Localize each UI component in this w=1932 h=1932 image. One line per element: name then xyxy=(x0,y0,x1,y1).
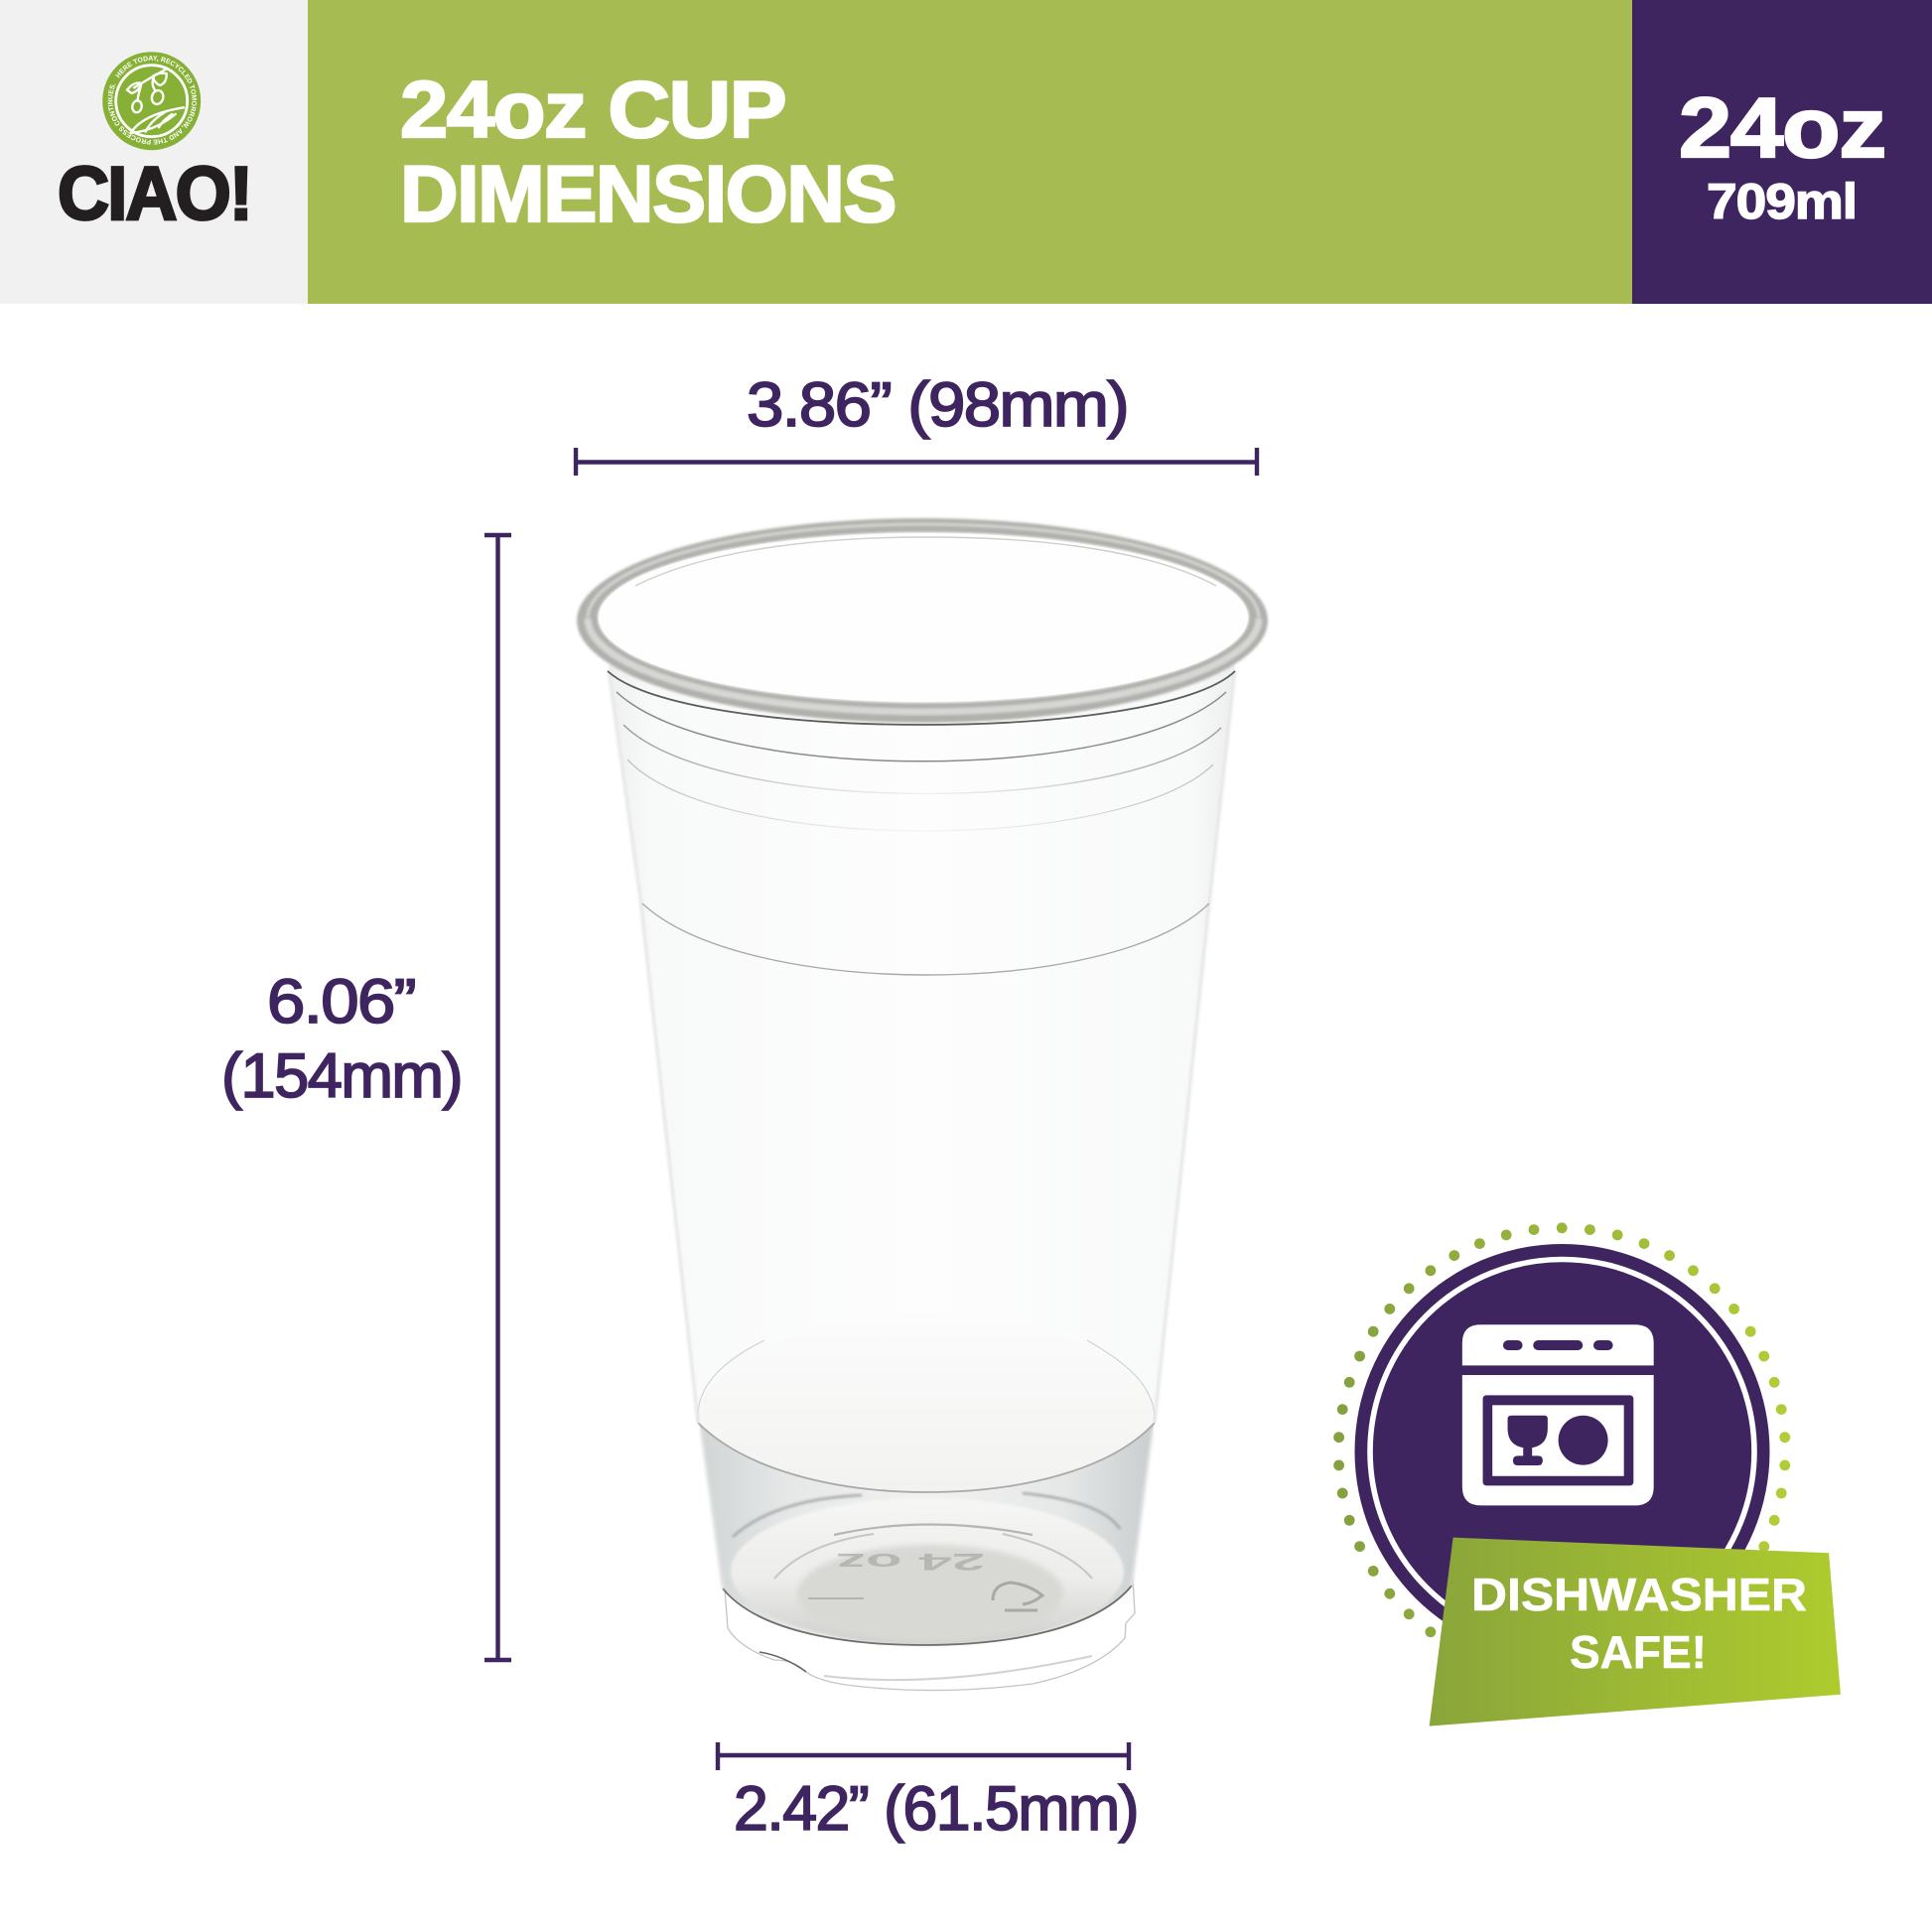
capacity panel xyxy=(1632,0,1932,304)
cup step ellipse xyxy=(698,1313,1155,1492)
height label xyxy=(221,967,462,1111)
purple disc xyxy=(1354,1244,1769,1659)
banner text xyxy=(1471,1569,1807,1678)
cup foot xyxy=(725,1579,1135,1691)
cup grooves xyxy=(617,692,1226,975)
cup lower base xyxy=(698,1423,1155,1645)
callout banner xyxy=(1430,1538,1841,1726)
capacity oz: 24oz xyxy=(1679,81,1885,176)
dotted ring xyxy=(1333,1222,1790,1637)
title panel xyxy=(308,0,1632,304)
banner text: SAFE! xyxy=(1570,1626,1707,1678)
cup body xyxy=(609,665,1235,1645)
capacity ml: 709ml xyxy=(1707,174,1857,229)
height label: (154mm) xyxy=(221,1041,462,1111)
cup side edges xyxy=(609,670,1235,1588)
logo wordmark: CIAO! xyxy=(58,152,251,236)
base diameter label: 2.42” (61.5mm) xyxy=(734,1774,1138,1844)
title xyxy=(400,66,896,239)
dimension: base diameter xyxy=(718,1742,1138,1844)
plastic cup xyxy=(577,518,1268,1691)
height bracket xyxy=(484,535,511,1660)
title: DIMENSIONS xyxy=(400,150,896,239)
title: 24oz CUP xyxy=(400,66,785,155)
embossed capacity mark: 24 oz xyxy=(836,1548,985,1575)
top diameter bracket xyxy=(576,448,1257,476)
icon: dishwasher xyxy=(1462,1324,1654,1505)
dimension: top diameter xyxy=(576,370,1257,476)
embossed recycling mark xyxy=(993,1583,1042,1610)
logo panel xyxy=(0,0,308,304)
cup rim xyxy=(577,518,1268,725)
icon: olive seal logo: HERE TODAY, RECYCLED TOMORROW, AND THE PROCESS CONTINUES. xyxy=(107,56,197,145)
dimension: height xyxy=(221,535,511,1660)
dishwasher safe badge xyxy=(1333,1222,1841,1726)
base diameter bracket xyxy=(718,1742,1129,1770)
height label: 6.06” xyxy=(267,967,415,1036)
header band xyxy=(0,0,1932,304)
banner text: DISHWASHER xyxy=(1471,1569,1807,1620)
top diameter label: 3.86” (98mm) xyxy=(747,370,1128,440)
